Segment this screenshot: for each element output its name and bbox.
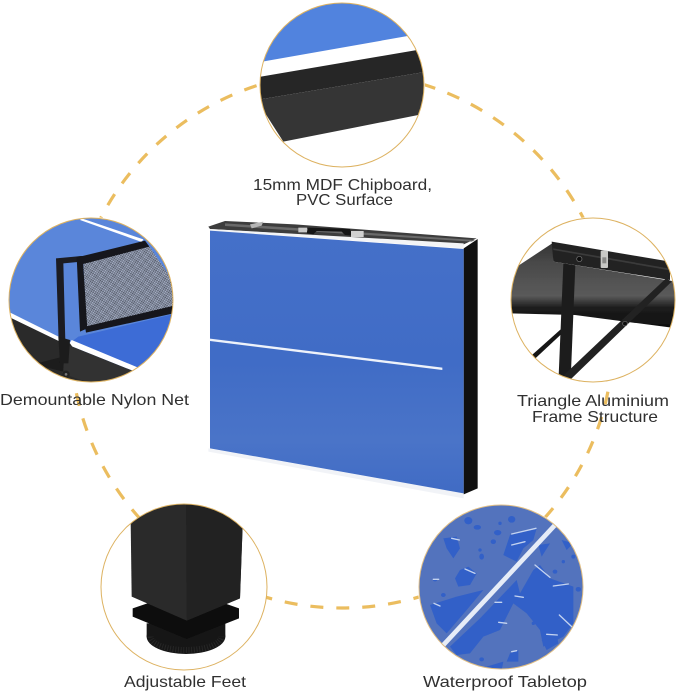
label: waterproof tabletop: Waterproof Tabletop — [423, 674, 587, 691]
image: water droplets — [417, 502, 587, 672]
table blue face — [210, 231, 464, 493]
label: triangle frame: Triangle Aluminium — [517, 393, 669, 410]
image: chipboard edge — [260, 4, 424, 142]
panel: adjustable feet detail — [101, 498, 267, 691]
table centre line — [210, 339, 442, 370]
folded table — [208, 221, 478, 498]
white table edges — [208, 229, 464, 498]
panel: triangle frame detail — [507, 217, 677, 426]
label: chipboard: 15mm MDF Chipboard, — [253, 177, 432, 194]
label: nylon net: Demountable Nylon Net — [0, 392, 190, 409]
label: triangle frame: Frame Structure — [532, 409, 658, 426]
image: net on table — [10, 218, 172, 382]
panel: chipboard detail — [253, 0, 432, 209]
label: triangle frame — [517, 393, 669, 426]
panel: waterproof tabletop detail — [417, 502, 587, 691]
label: adjustable feet: Adjustable Feet — [124, 674, 247, 691]
panel: nylon net detail — [0, 213, 190, 409]
image: aluminium frame — [507, 242, 677, 380]
table top edge and handle — [208, 221, 477, 244]
image: foot — [131, 498, 243, 654]
label: chipboard: PVC Surface — [296, 192, 393, 209]
table side edge — [464, 239, 478, 494]
dashed connecting ring — [71, 72, 613, 608]
label: chipboard — [253, 177, 432, 209]
